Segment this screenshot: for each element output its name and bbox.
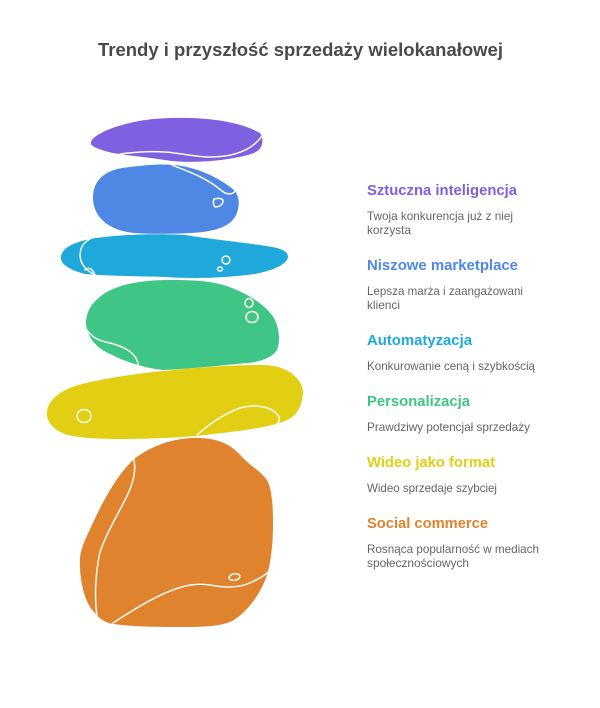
- item: Personalizacja: [367, 393, 530, 434]
- item: Personalizacja: Prawdziwy potencjał sprzedaży: [367, 420, 530, 434]
- item: Social commerce: Social commerce: [367, 515, 488, 532]
- item: Wideo jako format: [367, 454, 497, 495]
- item: Social commerce: Rosnąca popularność w mediach: [367, 542, 539, 556]
- stone: yellow (Wideo jako format): [47, 365, 303, 439]
- item: Sztuczna inteligencja: [367, 182, 518, 237]
- item: Wideo jako format: Wideo sprzedaje szybciej: [367, 481, 497, 495]
- item: Social commerce: społecznościowych: [367, 556, 469, 570]
- item: Personalizacja: Personalizacja: [367, 393, 471, 410]
- stone: cyan (Automatyzacja): [61, 234, 288, 278]
- item: Sztuczna inteligencja: Twoja konkurencja już z niej: [367, 209, 513, 223]
- stone: orange (Social commerce): [80, 438, 273, 627]
- stone: green (Personalizacja): [86, 280, 279, 370]
- stone: blue (Niszowe marketplace): [93, 165, 239, 234]
- title: Trendy i przyszłość sprzedaży wielokanałowej: [98, 39, 503, 60]
- item: Sztuczna inteligencja: korzysta: [367, 223, 411, 237]
- item: Niszowe marketplace: klienci: [367, 298, 400, 312]
- item: Automatyzacja: Konkurowanie ceną i szybkością: [367, 359, 535, 373]
- item: Sztuczna inteligencja: Sztuczna inteligencja: [367, 182, 518, 199]
- item: Social commerce: [367, 515, 539, 570]
- item: Niszowe marketplace: [367, 257, 523, 312]
- stone: purple (Sztuczna inteligencja): [91, 118, 262, 162]
- item: Automatyzacja: Automatyzacja: [367, 332, 473, 349]
- item: Automatyzacja: [367, 332, 535, 373]
- item: Niszowe marketplace: Niszowe marketplace: [367, 257, 518, 274]
- item: Niszowe marketplace: Lepsza marża i zaangażowani: [367, 284, 523, 298]
- item: Wideo jako format: Wideo jako format: [367, 454, 495, 471]
- stone stack: [47, 118, 303, 627]
